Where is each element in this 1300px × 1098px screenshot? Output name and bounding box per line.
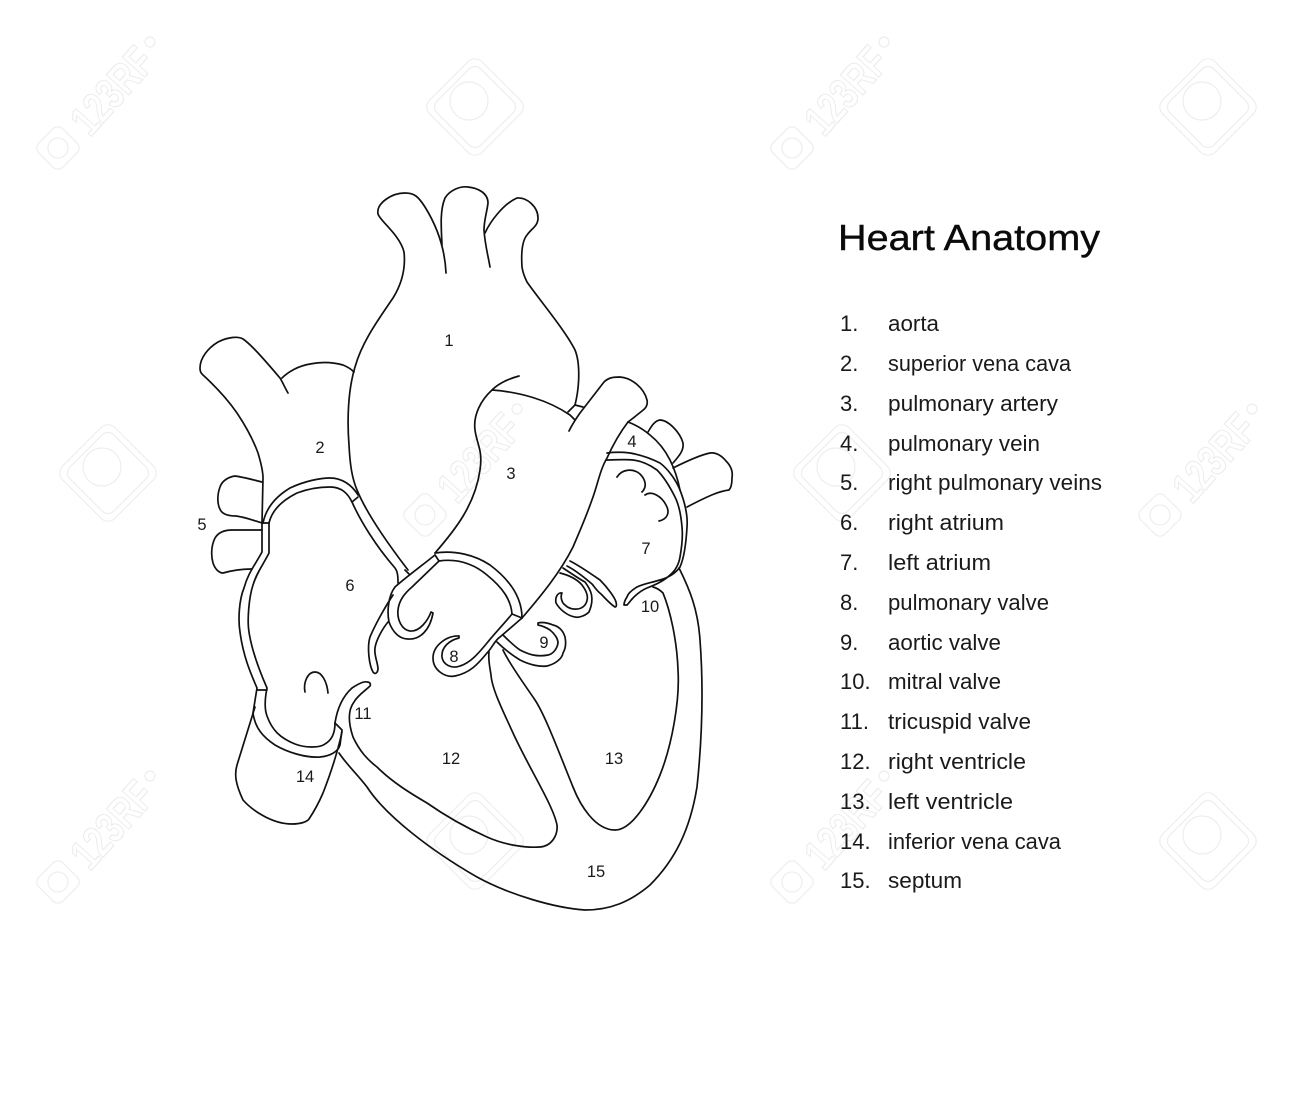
legend list: septum — [888, 868, 962, 893]
legend list: 11. — [840, 709, 869, 734]
valve flap — [369, 595, 393, 673]
pulmonary artery — [388, 376, 647, 676]
legend list: left ventricle — [888, 789, 1013, 814]
legend list: 13. — [840, 789, 871, 814]
diagram number labels: 12 — [442, 750, 460, 768]
legend list: pulmonary artery — [888, 391, 1058, 416]
diagram number labels: 11 — [354, 705, 372, 723]
legend list: 15. — [840, 868, 871, 893]
pulmonary veins and left atrium — [606, 420, 732, 605]
legend list: 10. — [840, 669, 871, 694]
watermark camera icons — [56, 55, 1260, 893]
diagram number labels: 3 — [506, 465, 516, 483]
watermark logo right: 123RF — [1163, 405, 1266, 512]
watermark logo top left — [34, 37, 164, 172]
diagram number labels: 13 — [605, 750, 623, 768]
watermark logo right — [1136, 404, 1266, 539]
legend list: 4. — [840, 431, 858, 456]
legend list: 7. — [840, 550, 858, 575]
right ventricle wall with tricuspid valve — [335, 652, 557, 847]
legend list: 1. — [840, 311, 858, 336]
aortic valve — [497, 623, 566, 666]
legend list: right pulmonary veins — [888, 470, 1102, 495]
diagram number labels: 15 — [587, 863, 605, 881]
legend list: pulmonary valve — [888, 590, 1049, 615]
right atrium — [239, 478, 409, 757]
diagram number labels: 9 — [539, 634, 549, 652]
watermark logo bottom centre: 123RF — [795, 772, 898, 879]
legend list: 12. — [840, 749, 871, 774]
diagram number labels: 8 — [449, 648, 459, 666]
mitral valve leaflets — [556, 561, 616, 617]
diagram number labels: 14 — [296, 768, 314, 786]
legend list: 3. — [840, 391, 858, 416]
heart diagram — [200, 187, 732, 910]
diagram number labels: 1 — [444, 332, 454, 350]
left ventricle wall — [503, 587, 678, 830]
legend list: left atrium — [888, 550, 991, 575]
diagram number labels: 2 — [315, 439, 325, 457]
legend list — [840, 311, 1102, 893]
watermark logo top centre: 123RF — [795, 38, 898, 145]
watermark logo top left: 123RF — [61, 38, 164, 145]
watermarks — [34, 37, 1266, 906]
legend list: 5. — [840, 470, 858, 495]
legend list: tricuspid valve — [888, 709, 1031, 734]
legend list: 8. — [840, 590, 858, 615]
watermark logo top centre — [768, 37, 898, 172]
superior vena cava — [200, 337, 354, 523]
watermark logo centre: 123RF — [428, 405, 531, 512]
right pulmonary veins — [212, 476, 262, 573]
legend list: right ventricle — [888, 749, 1026, 774]
legend list: inferior vena cava — [888, 829, 1062, 854]
legend list: superior vena cava — [888, 351, 1072, 376]
legend list: 9. — [840, 630, 858, 655]
diagram number labels — [197, 332, 659, 881]
legend list: right atrium — [888, 510, 1004, 535]
diagram number labels: 6 — [345, 577, 355, 595]
watermark logo centre — [401, 404, 531, 539]
diagram number labels: 7 — [641, 540, 651, 558]
watermark logo bottom centre — [768, 771, 898, 906]
legend list: aorta — [888, 311, 940, 336]
legend list: 14. — [840, 829, 871, 854]
diagram number labels: 4 — [627, 433, 637, 451]
legend list: mitral valve — [888, 669, 1001, 694]
watermark logo bottom left — [34, 771, 164, 906]
diagram number labels: 5 — [197, 516, 207, 534]
legend list: aortic valve — [888, 630, 1001, 655]
title: Heart Anatomy — [838, 217, 1101, 258]
diagram number labels: 10 — [641, 598, 659, 616]
inferior vena cava — [236, 707, 342, 824]
legend list: 6. — [840, 510, 858, 535]
aorta — [348, 187, 583, 570]
legend list: 2. — [840, 351, 858, 376]
legend list: pulmonary vein — [888, 431, 1040, 456]
watermark logo bottom left: 123RF — [61, 772, 164, 879]
heart outer wall — [339, 568, 702, 910]
